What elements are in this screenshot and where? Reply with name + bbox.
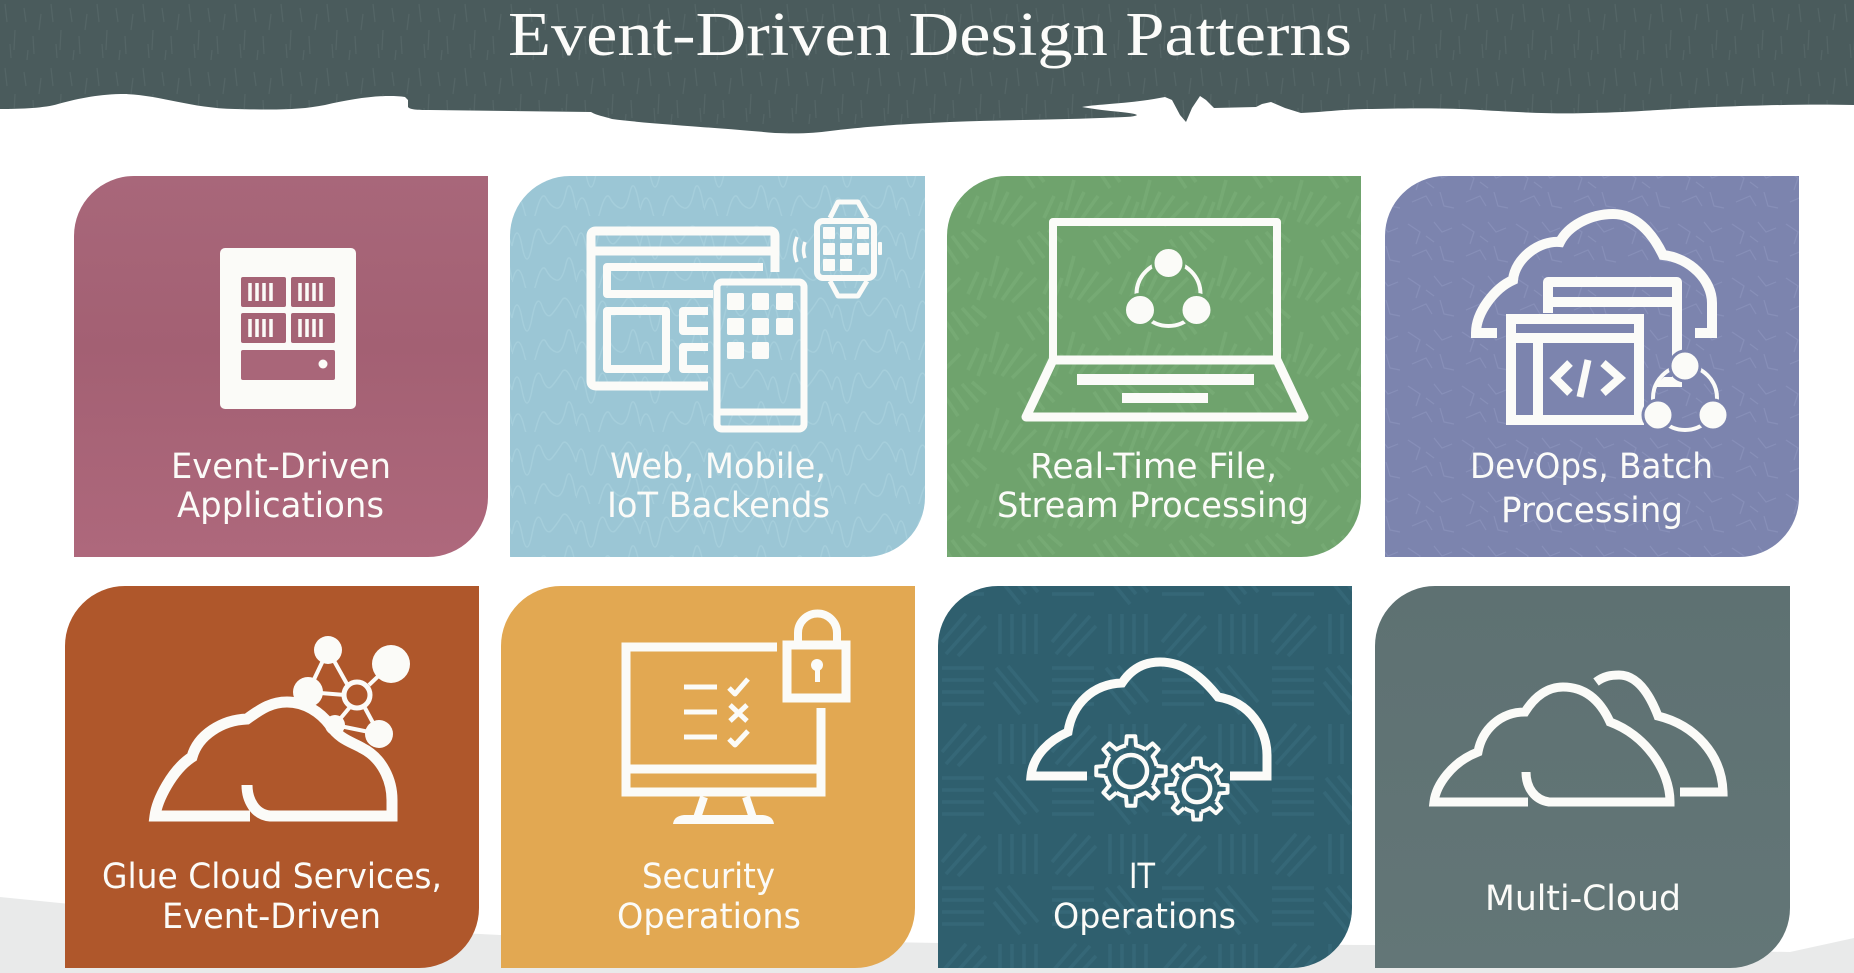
panel: Security Operations <box>501 586 915 968</box>
icon: cloud, code windows and share nodes <box>1476 214 1728 430</box>
icon: laptop with share nodes <box>1026 222 1304 417</box>
label <box>607 447 830 526</box>
label <box>617 857 801 937</box>
panel: Web, Mobile, IoT Backends <box>510 176 925 557</box>
icon: cloud with gears <box>1031 662 1267 820</box>
label <box>997 447 1309 526</box>
label: Web, Mobile, <box>610 447 826 487</box>
panel: Glue Cloud Services, Event-Driven <box>65 586 479 968</box>
label: Operations <box>1053 897 1236 937</box>
panel: Multi-Cloud <box>1375 586 1790 968</box>
panel: Real-Time File, Stream Processing <box>947 176 1361 557</box>
label: Operations <box>617 897 801 937</box>
title: Event-Driven Design Patterns <box>508 1 1352 69</box>
label: Processing <box>1501 491 1683 531</box>
label: IT <box>1129 857 1156 897</box>
label: Security <box>642 857 775 897</box>
label: Real-Time File, <box>1030 447 1277 487</box>
label: Stream Processing <box>997 486 1309 526</box>
icon: cloud with molecule network <box>155 636 410 816</box>
label: DevOps, Batch <box>1470 447 1713 487</box>
panel: DevOps, Batch Processing <box>1385 176 1799 557</box>
icon: server rack <box>220 248 356 409</box>
label <box>1470 447 1713 531</box>
icon: two clouds <box>1434 675 1723 802</box>
label: Applications <box>177 486 384 526</box>
label <box>102 857 442 937</box>
icon: browser, phone and watch <box>591 202 882 429</box>
panel: Event-Driven Applications <box>74 176 488 557</box>
label: Glue Cloud Services, <box>102 857 442 897</box>
header banner <box>0 0 1854 133</box>
label: Event-Driven <box>162 897 381 937</box>
label: Multi-Cloud <box>1485 879 1681 919</box>
label: Event-Driven <box>171 447 391 487</box>
label <box>171 447 391 526</box>
bottom grey torn background <box>0 897 1854 973</box>
label: IoT Backends <box>607 486 830 526</box>
icon: monitor with checklist and padlock <box>626 614 846 824</box>
label <box>1053 857 1236 937</box>
panel: IT Operations <box>938 586 1352 968</box>
